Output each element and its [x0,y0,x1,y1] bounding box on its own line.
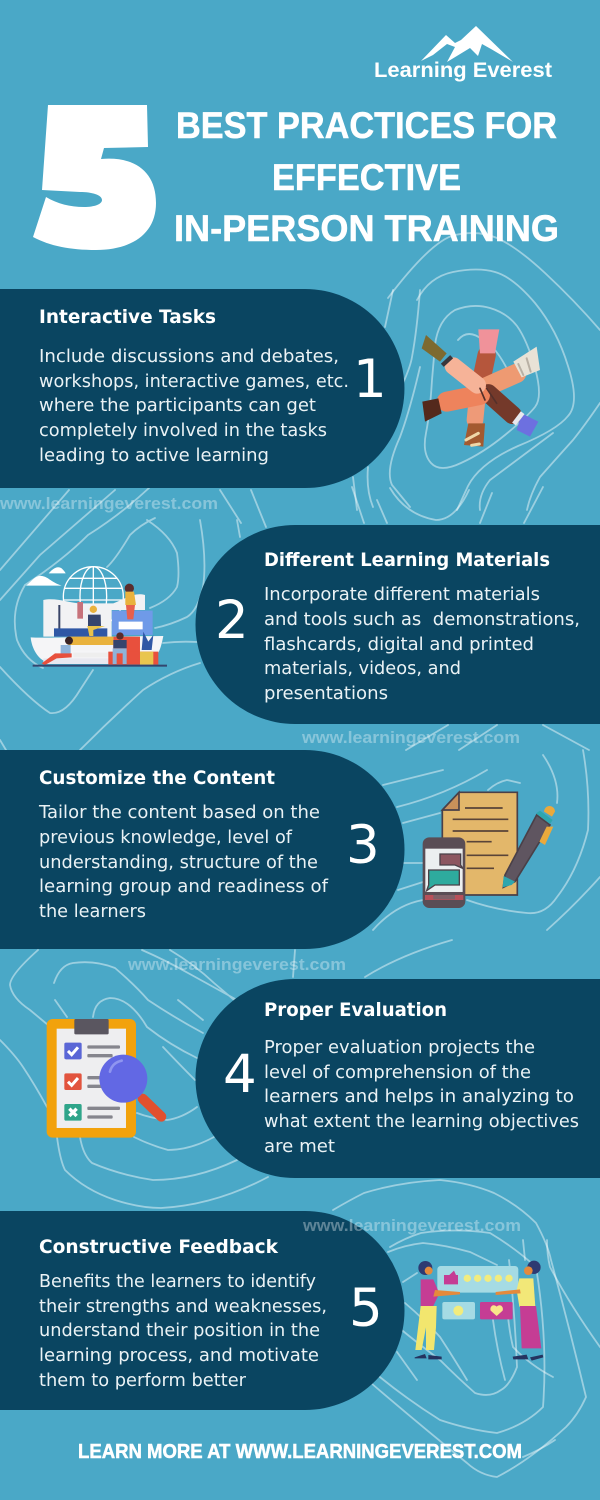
panel 3: Customize the Content: the learners [39,902,146,922]
panel 1: Interactive Tasks [0,289,404,488]
panel 4: Proper Evaluation: are met [264,1137,335,1157]
panel 3: Customize the Content: previous knowledge, level of [39,828,293,848]
panel 3: Customize the Content [0,750,404,949]
panel 1: Interactive Tasks: Include discussions and debates, [39,347,339,367]
panel 5: Constructive Feedback: understand their position in the [39,1321,320,1341]
icon: books and learners [26,567,167,667]
icon: document, phone and pen [423,792,555,908]
panel 4: Proper Evaluation: 4 [223,1044,257,1105]
icon: two people with ratings [415,1261,543,1361]
panel 2: Different Learning Materials: Different Learning Materials [264,549,550,571]
panel 2: Different Learning Materials: Incorporate different materials [264,585,540,605]
footer call to action: LEARN MORE AT WWW.LEARNINGEVEREST.COM [78,1441,522,1463]
logo: Learning Everest: Learning Everest [374,59,552,82]
title: EFFECTIVE [272,157,461,198]
big number 5 [33,105,156,250]
panel 5: Constructive Feedback: learning process, and motivate [39,1346,319,1366]
panel 5: Constructive Feedback [0,1211,404,1410]
watermark: www.learningeverest.com [0,494,218,513]
panel 4: Proper Evaluation: learners and helps in analyzing to [264,1087,574,1107]
panel 5: Constructive Feedback: Constructive Feedback [39,1236,278,1258]
panel 3: Customize the Content: Tailor the content based on the [38,803,320,823]
panel 4: Proper Evaluation: what extent the learning objectives [264,1112,579,1132]
panel 4: Proper Evaluation: Proper evaluation projects the [264,1038,535,1058]
watermark: www.learningeverest.com [302,1216,521,1235]
icon: stacked hands [422,329,540,447]
panel 2: Different Learning Materials [196,525,600,724]
panel 3: Customize the Content: understanding, structure of the [39,853,318,873]
panel 1: Interactive Tasks: workshops, interactive games, etc. [39,372,349,392]
panel 3: Customize the Content: 3 [346,815,380,876]
icon: clipboard and magnifier [47,1019,161,1138]
panel 2: Different Learning Materials: flashcards, digital and printed [264,635,534,655]
title: BEST PRACTICES FOR [176,105,557,146]
panel 4: Proper Evaluation [196,979,600,1178]
logo: Learning Everest [374,26,552,82]
panel 5: Constructive Feedback: them to perform better [39,1371,247,1391]
panel 5: Constructive Feedback: 5 [349,1278,383,1339]
watermark: www.learningeverest.com [301,728,520,747]
panel 1: Interactive Tasks: leading to active learning [39,446,269,466]
panel 1: Interactive Tasks: completely involved in the tasks [39,421,327,441]
panel 1: Interactive Tasks: Interactive Tasks [39,306,216,328]
panel 2: Different Learning Materials: presentations [264,684,388,704]
title: IN-PERSON TRAINING [174,208,559,249]
panel 5: Constructive Feedback: Benefits the learners to identify [39,1272,316,1292]
title [174,105,559,249]
panel 3: Customize the Content: Customize the Content [39,767,275,789]
panel 1: Interactive Tasks: where the participants can get [39,396,316,416]
panel 1: Interactive Tasks: 1 [353,349,387,410]
panel 2: Different Learning Materials: and tools such as demonstrations, [264,610,580,630]
panel 5: Constructive Feedback: their strengths and weaknesses, [39,1297,327,1317]
watermark: www.learningeverest.com [127,955,346,974]
panel 3: Customize the Content: learning group and readiness of [39,877,329,897]
panel 2: Different Learning Materials: 2 [215,590,249,651]
panel 4: Proper Evaluation: level of comprehension of the [264,1063,531,1083]
panel 2: Different Learning Materials: materials, videos, and [264,659,461,679]
panel 4: Proper Evaluation: Proper Evaluation [264,999,447,1021]
